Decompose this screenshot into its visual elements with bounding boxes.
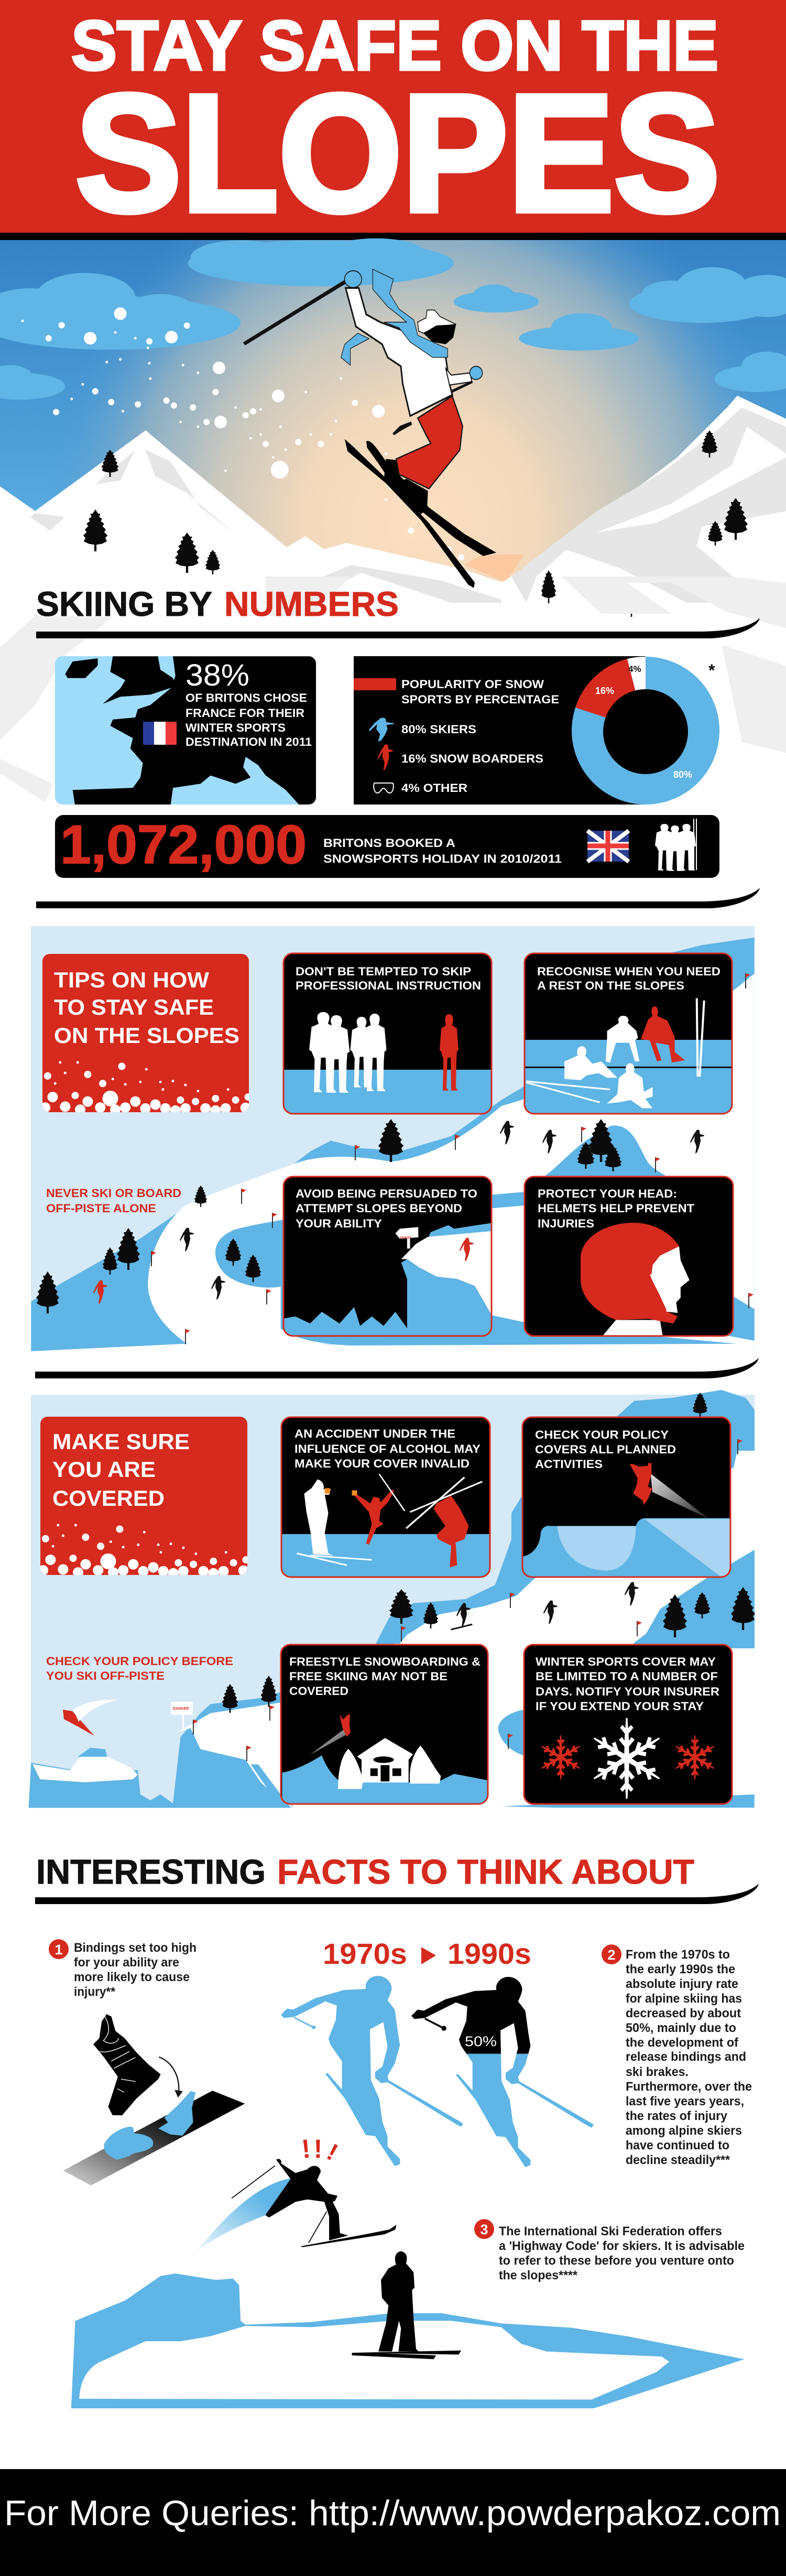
card: recognise when you need a rest: A REST ON THE SLOPES xyxy=(537,979,684,992)
text: the rates of injury xyxy=(626,2109,728,2123)
text: ski brakes. xyxy=(626,2065,689,2079)
card: freestyle: FREESTYLE SNOWBOARDING & xyxy=(289,1655,481,1668)
icon: UK flag xyxy=(587,831,629,862)
badge 2: 2 xyxy=(607,1947,616,1963)
red title card xyxy=(40,1417,247,1575)
scarf xyxy=(373,269,447,357)
red title card: YOU ARE xyxy=(52,1457,156,1482)
fact 1: bindings xyxy=(49,1939,245,2186)
mountain shading xyxy=(30,407,786,603)
slopes background xyxy=(29,1390,762,1818)
card: alcohol: INFLUENCE OF ALCOHOL MAY xyxy=(294,1442,481,1455)
title line: stay safe on the: STAY SAFE ON THE xyxy=(71,7,718,85)
piste flags xyxy=(151,973,754,1344)
blue mountain outline and standing skier xyxy=(71,2251,745,2408)
donut chart xyxy=(572,657,719,805)
divider ski 3 xyxy=(35,1358,759,1378)
callout: check policy off-piste: YOU SKI OFF-PISTE xyxy=(46,1669,165,1682)
text: absolute injury rate xyxy=(626,1977,738,1991)
badge 1 xyxy=(49,1939,69,1959)
hat xyxy=(418,310,456,333)
donut chart: 80% xyxy=(673,769,692,780)
glove xyxy=(344,271,362,288)
card: professional instruction: DON'T BE TEMPTED TO SKIP xyxy=(296,965,471,978)
text: Bindings set too high xyxy=(74,1941,196,1955)
card: alcohol: MAKE YOUR COVER INVALID xyxy=(294,1457,470,1470)
text xyxy=(499,2224,745,2282)
hair xyxy=(423,324,456,344)
heading: skiing by numbers: NUMBERS xyxy=(224,584,399,623)
donut chart: 16% xyxy=(595,686,614,696)
boots xyxy=(384,459,428,516)
text: 50%, mainly due to xyxy=(626,2021,736,2035)
card: professional instruction xyxy=(283,953,492,1117)
text: the development of xyxy=(626,2036,739,2050)
red ski trousers xyxy=(396,396,463,488)
badge 2 xyxy=(602,1944,621,1964)
resting skiers xyxy=(526,998,704,1108)
white group of people xyxy=(309,1012,387,1093)
ski boot and binding illustration xyxy=(63,2014,245,2186)
red person standing apart xyxy=(440,1014,458,1091)
caption: BRITONS BOOKED A xyxy=(323,836,455,850)
badge 3 xyxy=(474,2219,494,2239)
text: Furthermore, over the xyxy=(626,2080,752,2094)
helmet and face profile xyxy=(581,1223,690,1338)
panel: popularity of snow sports xyxy=(354,656,719,805)
callout: check policy off-piste xyxy=(46,1655,233,1682)
background shading behind numbers section xyxy=(0,577,786,802)
callout: never ski alone: NEVER SKI OR BOARD xyxy=(46,1187,181,1200)
red key bar xyxy=(354,678,396,690)
footnote star: * xyxy=(708,661,715,680)
text: among alpine skiers xyxy=(626,2124,742,2138)
callout: never ski alone: OFF-PISTE ALONE xyxy=(46,1202,156,1215)
red upside-down skier xyxy=(433,1496,469,1568)
torso and arm xyxy=(346,288,452,416)
red skier xyxy=(460,1238,474,1262)
stat: 38%: 38% xyxy=(185,658,249,692)
donut chart: 4% xyxy=(628,664,641,674)
skis xyxy=(345,439,475,588)
card: slopes beyond your ability: DANGER xyxy=(400,1236,411,1240)
clouds xyxy=(0,238,786,400)
card: alcohol: AN ACCIDENT UNDER THE xyxy=(294,1427,455,1440)
white chalet and trees xyxy=(357,1738,413,1782)
card: freestyle: COVERED xyxy=(289,1684,348,1698)
card: winter sports cover days: DAYS. NOTIFY YOUR INSURER xyxy=(536,1685,719,1698)
piste flags xyxy=(193,1439,743,1761)
small skiers xyxy=(451,1582,639,1631)
title line: slopes: SLOPES xyxy=(75,60,720,246)
callout: never ski alone xyxy=(46,1187,181,1215)
skier figure xyxy=(243,269,496,588)
sun glow patch xyxy=(464,554,524,582)
card: protect your head xyxy=(525,1177,733,1338)
card: planned activities: COVERS ALL PLANNED xyxy=(535,1443,676,1456)
falling skier with warning marks xyxy=(197,2134,397,2251)
text: last five years years, xyxy=(626,2094,744,2108)
header banner xyxy=(0,0,786,246)
map of western Europe xyxy=(65,656,321,807)
panel title: POPULARITY OF SNOW xyxy=(401,678,544,691)
danger sign and jumping red skier: DANGER xyxy=(173,1707,189,1711)
card: recognise when you need a rest xyxy=(525,953,732,1116)
callout: check policy off-piste: CHECK YOUR POLICY BEFORE xyxy=(46,1655,233,1668)
legend: skiers xyxy=(369,718,476,742)
caption: DESTINATION IN 2011 xyxy=(185,735,312,748)
falling skier with warning marks: ! xyxy=(314,2134,322,2164)
card: planned activities: ACTIVITIES xyxy=(535,1458,603,1471)
text: From the 1970s to xyxy=(626,1948,730,1962)
half pipe xyxy=(522,1518,732,1579)
exclamation marks: ! xyxy=(300,2134,312,2164)
skier silhouettes xyxy=(281,1976,594,2167)
pine trees xyxy=(36,1119,621,1313)
text: to refer to these before you venture onto xyxy=(499,2254,734,2268)
text: for alpine skiing has xyxy=(626,1992,742,2006)
card: protect your head: INJURIES xyxy=(538,1217,594,1230)
pine trees xyxy=(83,430,748,617)
heading: interesting facts: FACTS TO THINK ABOUT xyxy=(277,1852,694,1891)
badge 1: 1 xyxy=(54,1942,63,1958)
danger sign xyxy=(395,1227,418,1248)
panel: 1,072,000 Britons xyxy=(55,814,719,878)
era labels: 1990s xyxy=(447,1937,531,1970)
text: injury** xyxy=(74,1985,116,1999)
card: slopes beyond your ability: YOUR ABILITY xyxy=(296,1217,382,1230)
snow spray xyxy=(23,313,461,557)
panel: 38% choose France xyxy=(55,656,321,807)
danger sign and jumping red skier xyxy=(63,1700,193,1736)
card: professional instruction: PROFESSIONAL INSTRUCTION xyxy=(296,979,481,992)
big number: 1,072,000 xyxy=(60,814,307,875)
scarf tail xyxy=(341,333,369,365)
slopes background xyxy=(31,938,755,1358)
panel: make sure you are covered xyxy=(29,1390,762,1818)
red title card: TIPS ON HOW xyxy=(54,968,209,992)
era labels xyxy=(323,1937,531,1970)
heading: skiing by numbers: SKIING BY xyxy=(36,584,212,623)
red title card: MAKE SURE xyxy=(52,1429,190,1454)
caption: WINTER SPORTS xyxy=(185,721,286,734)
footer bar: For More Queries: http://www.powderpakoz.com xyxy=(4,2493,781,2533)
text: for your ability are xyxy=(74,1955,179,1970)
fact 3: highway code xyxy=(474,2219,745,2282)
card: planned activities xyxy=(522,1417,732,1579)
footer bar xyxy=(0,2469,786,2576)
caption xyxy=(323,836,562,865)
card: winter sports cover days: IF YOU EXTEND YOUR STAY xyxy=(536,1700,704,1713)
text: a 'Highway Code' for skiers. It is advisable xyxy=(499,2239,745,2253)
legend: snow boarders xyxy=(378,744,543,770)
red title card xyxy=(42,954,249,1112)
heading: interesting facts: INTERESTING xyxy=(36,1852,266,1891)
caption: SNOWSPORTS HOLIDAY IN 2010/2011 xyxy=(323,852,562,865)
card: protect your head: HELMETS HELP PREVENT xyxy=(538,1202,695,1215)
card: winter sports cover days: WINTER SPORTS COVER MAY xyxy=(536,1655,716,1668)
red title card: COVERED xyxy=(52,1486,165,1510)
text: have continued to xyxy=(626,2138,729,2153)
card: freestyle xyxy=(281,1645,488,1807)
text: the early 1990s the xyxy=(626,1962,735,1976)
grey trail and red rider xyxy=(310,1729,348,1755)
falling skier with warning marks: ! xyxy=(323,2138,343,2166)
white drinking skier xyxy=(304,1480,334,1556)
era labels: 1970s xyxy=(323,1937,407,1970)
red boarder xyxy=(630,1463,652,1505)
icon: group of skiers xyxy=(655,819,697,871)
legend: other: 4% OTHER xyxy=(401,781,467,795)
legend: snow boarders: 16% SNOW BOARDERS xyxy=(401,752,543,765)
icon: French flag xyxy=(143,722,177,745)
pine trees xyxy=(222,1393,755,1713)
panel title: SPORTS BY PERCENTAGE xyxy=(401,693,559,706)
text: The International Ski Federation offers xyxy=(499,2224,722,2238)
badge 3: 3 xyxy=(480,2222,488,2237)
card: slopes beyond your ability xyxy=(282,1177,493,1338)
other arm xyxy=(446,368,472,385)
panel title xyxy=(401,678,559,706)
red title card: TO STAY SAFE xyxy=(54,995,214,1019)
card: alcohol xyxy=(281,1417,490,1579)
text: decreased by about xyxy=(626,2006,741,2020)
card: slopes beyond your ability: ATTEMPT SLOPES BEYOND xyxy=(296,1202,462,1215)
text xyxy=(626,1948,752,2167)
grey trail xyxy=(651,1474,709,1519)
mountains xyxy=(0,396,786,922)
red title card: ON THE SLOPES xyxy=(54,1023,239,1048)
small skiers xyxy=(93,1121,704,1304)
hero illustration: sky, clouds, mountains, skier xyxy=(0,238,786,922)
red jumping skier xyxy=(353,1489,394,1545)
text: decline steadily*** xyxy=(626,2153,730,2167)
ski pole xyxy=(243,280,346,345)
panel: tips on how to stay safe xyxy=(31,926,755,1358)
heading: interesting facts xyxy=(35,1852,759,1904)
caption: FRANCE FOR THEIR xyxy=(185,707,304,720)
card: freestyle: FREE SKIING MAY NOT BE xyxy=(289,1670,447,1683)
caption xyxy=(185,691,312,748)
snowflakes xyxy=(540,1718,716,1799)
heading: skiing by numbers xyxy=(36,584,760,638)
text: release bindings and xyxy=(626,2050,746,2064)
text xyxy=(74,1941,196,1999)
legend: skiers: 80% SKIERS xyxy=(401,723,476,736)
card: planned activities: CHECK YOUR POLICY xyxy=(535,1428,669,1441)
text: the slopes**** xyxy=(499,2268,578,2282)
divider ski 2 xyxy=(36,888,760,908)
card: winter sports cover days: BE LIMITED TO A NUMBER OF xyxy=(536,1670,718,1683)
legend: other xyxy=(374,781,467,795)
caption: OF BRITONS CHOSE xyxy=(185,691,307,704)
card: recognise when you need a rest: RECOGNISE WHEN YOU NEED xyxy=(537,965,720,978)
card: protect your head: PROTECT YOUR HEAD: xyxy=(538,1187,677,1200)
50% label: 50% xyxy=(465,2034,497,2049)
fact 2: 1970s to 1990s chart xyxy=(281,1937,752,2167)
text: more likely to cause xyxy=(74,1970,190,1984)
card: slopes beyond your ability: AVOID BEING PERSUADED TO xyxy=(296,1187,477,1200)
card: winter sports cover days xyxy=(524,1645,732,1804)
